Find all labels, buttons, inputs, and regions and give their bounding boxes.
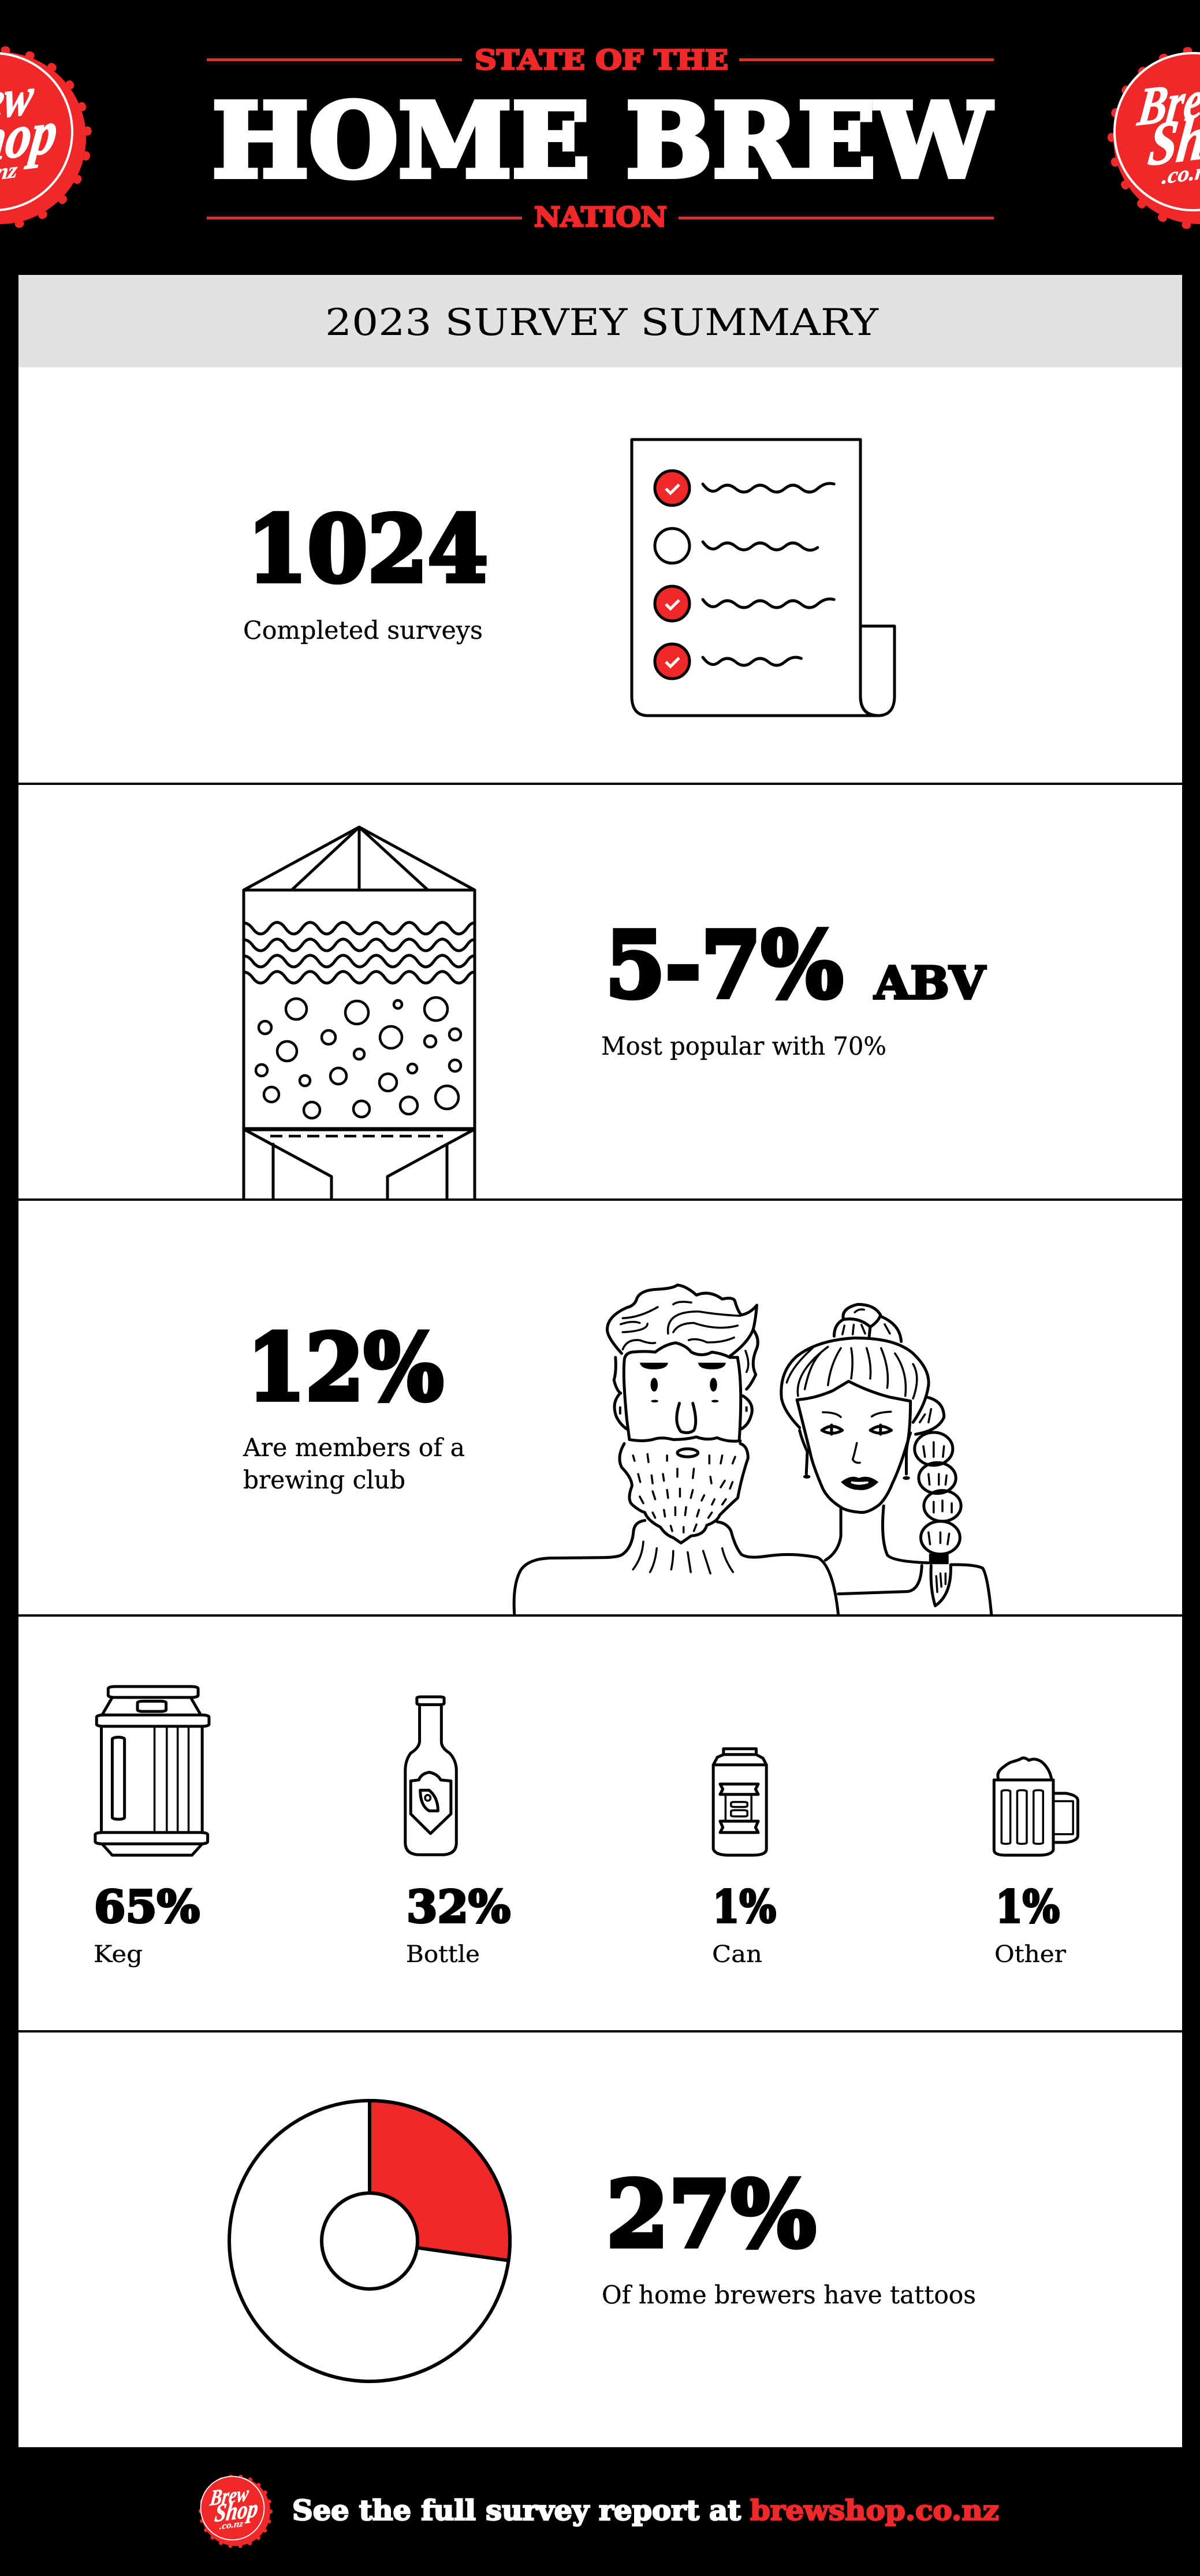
panel: survey summary heading: 2023 SURVEY SUMMARY [325, 301, 879, 344]
figure: woman [781, 1304, 992, 1614]
group: keg [94, 1687, 209, 1968]
caption: are members of a brewing club: Are members of a [243, 1434, 465, 1462]
stat: 32%: 32% [407, 1881, 510, 1933]
figure: man [514, 1285, 838, 1614]
stat: 65%: 65% [94, 1881, 200, 1933]
group: other [994, 1758, 1078, 1968]
icon: right bottle cap logo [1112, 50, 1200, 226]
icon: footer bottle cap logo: .co.nz [219, 2518, 244, 2532]
panel: container types [18, 1615, 1182, 2031]
stat: 27%: 27% [606, 2161, 816, 2268]
title: NATION [534, 202, 667, 233]
group: bottle [405, 1697, 510, 1968]
icon: brewing tank [244, 827, 475, 1200]
caption: are members of a brewing club: brewing club [243, 1466, 405, 1495]
stat unit: ABV: ABV [874, 957, 986, 1010]
caption: tattoos: Of home brewers have tattoos [602, 2281, 976, 2310]
stat: 1% other: 1% [996, 1881, 1060, 1933]
title: HOME BREW [212, 81, 992, 201]
stat: 1024: 1024 [247, 496, 488, 603]
icon: footer bottle cap logo: Brew [208, 2481, 250, 2511]
title [207, 44, 994, 233]
icon: beer mug [994, 1758, 1078, 1855]
icon: keg [95, 1687, 209, 1855]
icon: can [713, 1749, 766, 1855]
caption: most popular: Most popular with 70% [601, 1032, 886, 1061]
panel: completed surveys [18, 367, 1182, 784]
footer text: See the full survey report at [292, 2495, 741, 2527]
illustration: bearded man and woman with braid [514, 1285, 992, 1614]
panel: tattoos [18, 2031, 1182, 2447]
caption: completed surveys: Completed surveys [243, 616, 483, 645]
panel: survey summary heading [18, 275, 1182, 367]
panel: ABV [18, 784, 1182, 1200]
icon: footer bottle cap logo: Shop [213, 2495, 260, 2527]
panel: brewing club [18, 1200, 1182, 1615]
footer text: brewshop.co.nz [750, 2495, 999, 2527]
icon: left bottle cap logo [0, 43, 95, 233]
chart: donut 27 percent [229, 2101, 510, 2381]
label: keg: Keg [94, 1941, 143, 1968]
label: bottle: Bottle [406, 1941, 480, 1968]
title: STATE OF THE [475, 44, 728, 76]
icon: bottle [405, 1697, 456, 1855]
stat: 12%: 12% [247, 1315, 444, 1421]
label: can: Can [712, 1941, 762, 1968]
stat: 5-7% ABV: 5-7% [605, 912, 843, 1019]
icon: footer bottle cap logo [200, 2476, 271, 2547]
icon: survey checklist document [632, 440, 895, 716]
stat: 1% can: 1% [713, 1881, 776, 1933]
group: can [712, 1749, 776, 1968]
label: other: Other [994, 1941, 1067, 1968]
footer [200, 2476, 999, 2547]
